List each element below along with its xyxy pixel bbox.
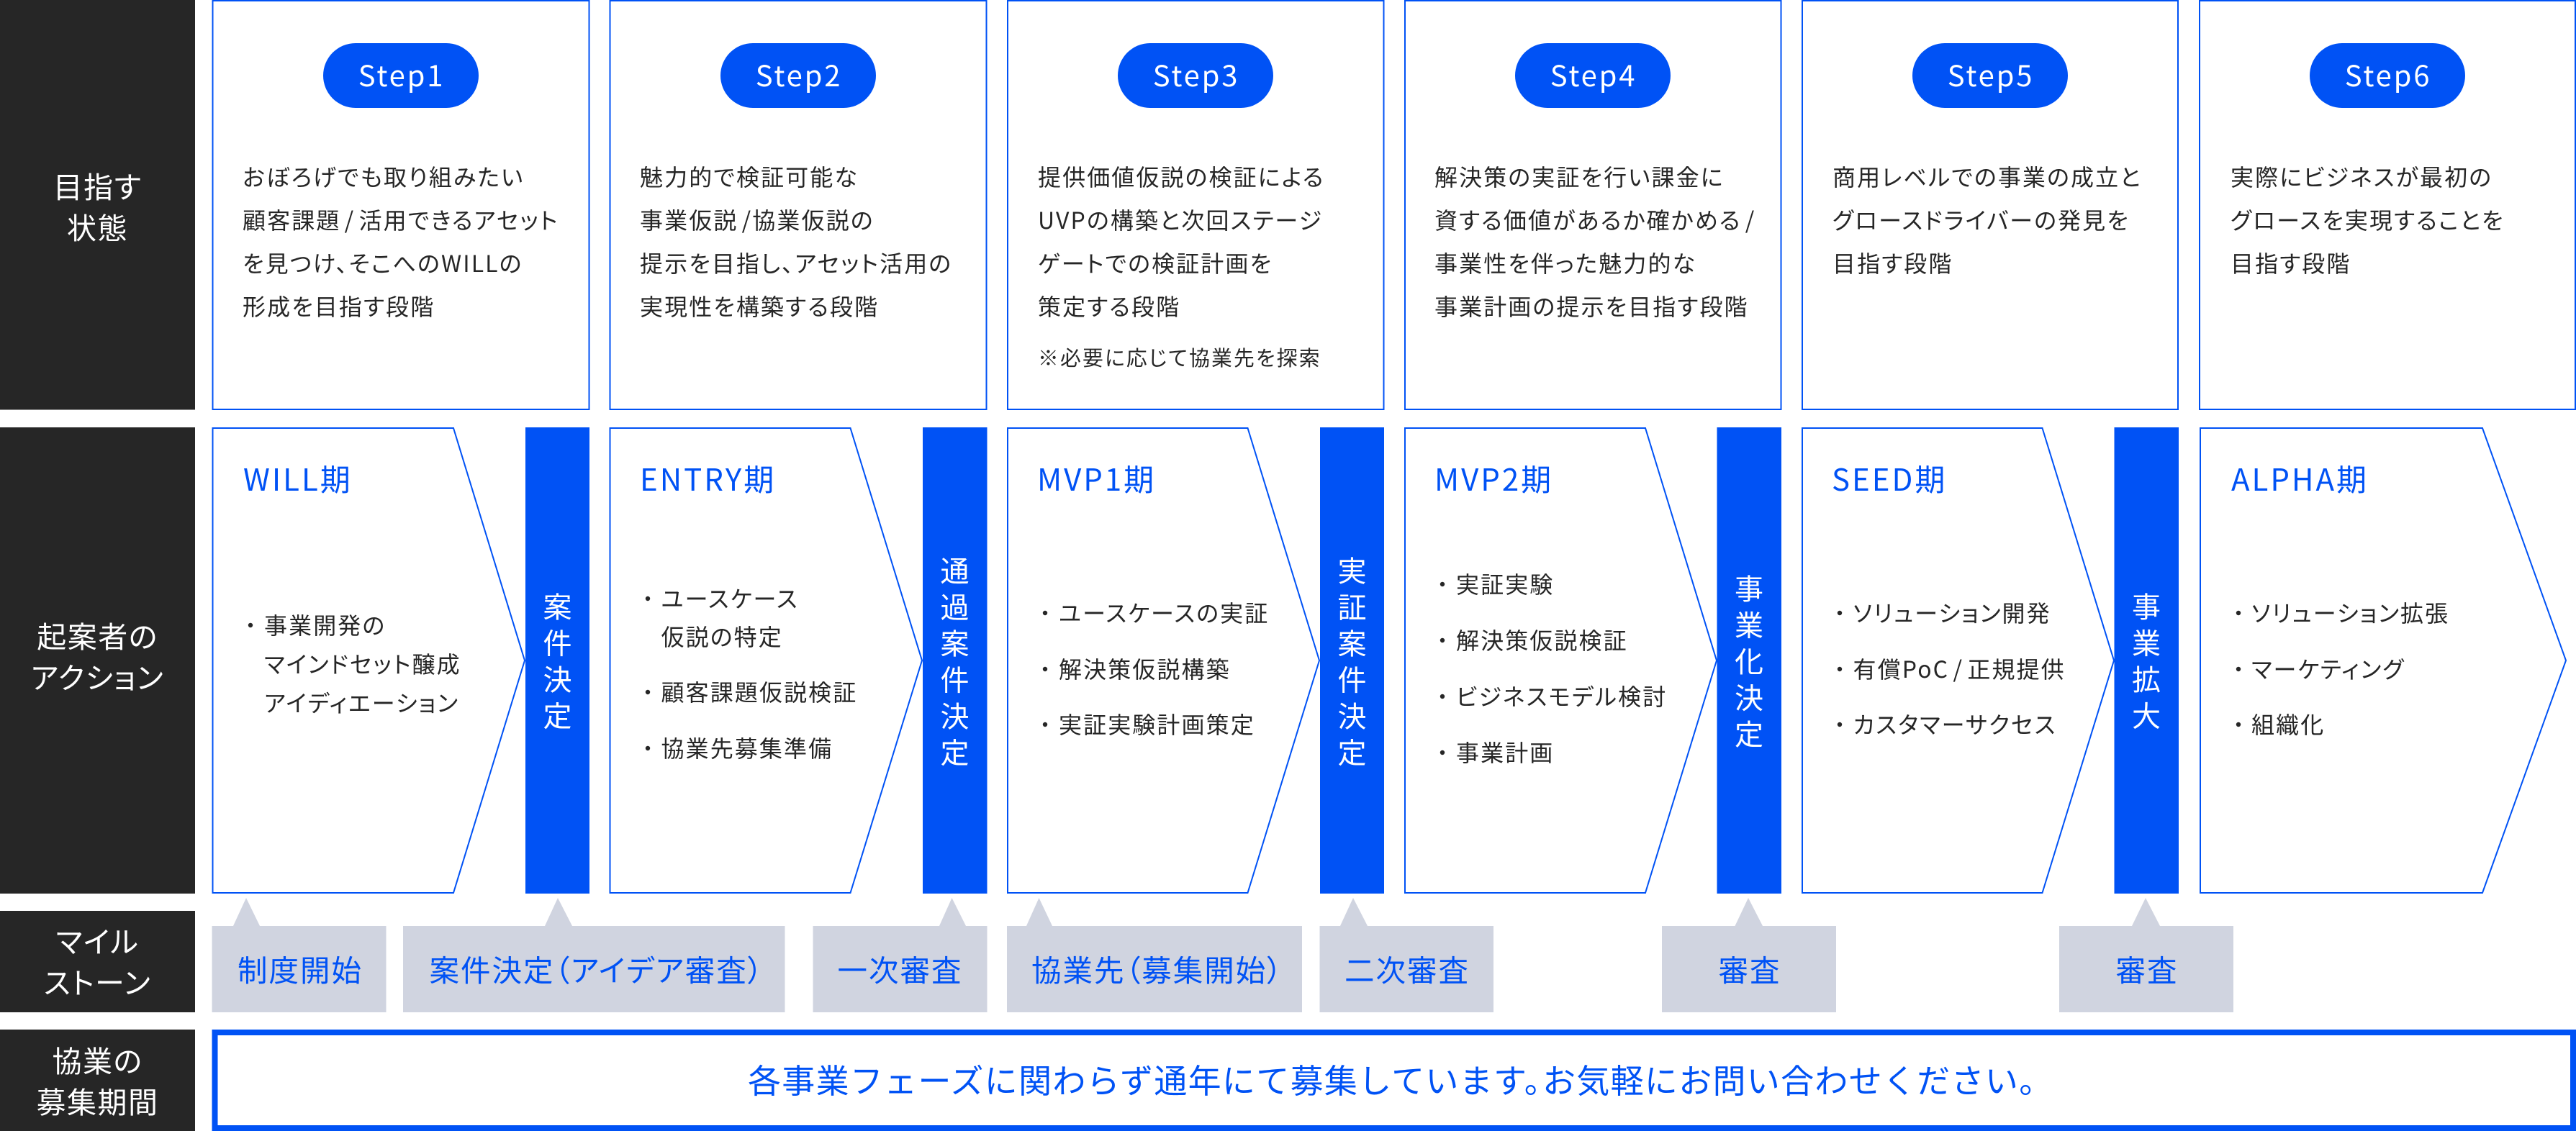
phase actions: 仮説の特定 xyxy=(661,619,783,653)
gate: 事業拡大: 大 xyxy=(2132,694,2161,735)
step 5 description: 商用レベルでの事業の成立と xyxy=(1832,160,2141,193)
step 3 note: ※必要に応じて協業先を探索 xyxy=(1038,342,1321,372)
gate: 事業化決定: 業 xyxy=(1735,603,1763,645)
row label: 起案者のアクション: アクション xyxy=(31,654,164,697)
phase actions xyxy=(1440,567,1667,768)
panel: step 6 xyxy=(2200,1,2575,409)
gate: 実証案件決定: 定 xyxy=(1337,730,1366,771)
gate: 事業化決定: 決 xyxy=(1735,675,1763,717)
phase actions: マーケティング xyxy=(2251,652,2405,685)
phase actions: 組織化 xyxy=(2251,707,2325,740)
phase actions: 実証実験 xyxy=(1456,567,1554,600)
step badge 5: Step5 xyxy=(1948,53,2034,95)
phase actions: 有償PoC / 正規提供 xyxy=(1853,652,2066,685)
phase actions xyxy=(2236,596,2449,740)
step 6 description: 実際にビジネスが最初の xyxy=(2231,160,2493,193)
step badge 3: Step3 xyxy=(1153,53,1239,95)
step 2 description: 実現性を構築する段階 xyxy=(640,289,879,322)
row label: マイルストーン: ストーン xyxy=(44,959,151,1002)
phase actions: アイディエーション xyxy=(264,686,459,719)
step badge 1 xyxy=(323,43,479,108)
panel: step 2 xyxy=(610,1,986,409)
gate: 事業化決定: 事 xyxy=(1735,566,1763,608)
phase actions: 解決策仮説構築 xyxy=(1059,652,1231,685)
gate: 実証案件決定: 実 xyxy=(1337,548,1366,590)
milestone: 案件決定（アイデア審査） xyxy=(403,898,785,1012)
gate: 通過案件決定 xyxy=(923,427,988,894)
row label: 協業の募集期間: 協業の xyxy=(52,1037,143,1081)
phase: MVP2期 xyxy=(1405,428,1717,893)
phase actions: 協業先募集準備 xyxy=(661,731,833,764)
step 5 description: グロースドライバーの発見を xyxy=(1832,203,2130,236)
panel: step 3 xyxy=(1008,1,1383,409)
step badge 5 xyxy=(1912,43,2068,108)
gate: 通過案件決定: 通 xyxy=(940,548,969,590)
phase actions: ソリューション拡張 xyxy=(2251,596,2449,629)
gate: 事業化決定: 化 xyxy=(1735,639,1763,681)
gate: 案件決定: 件 xyxy=(543,620,571,662)
step 2 description: 提示を目指し、アセット活用の xyxy=(640,246,952,279)
gate: 通過案件決定: 過 xyxy=(940,584,969,626)
phase actions: 実証実験計画策定 xyxy=(1059,707,1255,740)
phase actions: マインドセット醸成 xyxy=(264,647,461,680)
step badge 6: Step6 xyxy=(2345,53,2431,95)
row label: 目指す状態 xyxy=(0,0,195,410)
phase: ALPHA期 xyxy=(2200,428,2566,893)
callout: 協業の募集期間 xyxy=(214,1032,2573,1128)
gate: 事業拡大: 拡 xyxy=(2132,657,2161,699)
row label: 目指す状態: 目指す xyxy=(53,163,142,206)
panel: step 1 xyxy=(213,1,589,409)
step 4 description: 事業計画の提示を目指す段階 xyxy=(1434,289,1749,322)
step 1 description: を見つけ、そこへのWILLの xyxy=(243,246,523,279)
phase title: ALPHA期 xyxy=(2231,456,2369,500)
gate: 実証案件決定 xyxy=(1320,427,1384,894)
row label: マイルストーン xyxy=(0,911,195,1012)
gate: 事業化決定 xyxy=(1717,427,1781,894)
step 3 description: ゲートでの検証計画を xyxy=(1038,246,1273,279)
milestone: 審査 xyxy=(1662,898,1836,1012)
phase actions: ユースケースの実証 xyxy=(1059,596,1269,629)
phase: WILL期 xyxy=(213,428,525,893)
row label: 起案者のアクション: 起案者の xyxy=(37,613,158,656)
milestone: 案件決定（アイデア審査）: 案件決定（アイデア審査） xyxy=(429,947,764,990)
gate: 通過案件決定: 定 xyxy=(940,730,969,771)
gate: 通過案件決定: 件 xyxy=(940,658,969,699)
milestone: 協業先（募集開始）: 協業先（募集開始） xyxy=(1031,947,1283,990)
step badge 4: Step4 xyxy=(1550,53,1637,95)
step 3 description: 策定する段階 xyxy=(1038,289,1180,322)
step badge 3 xyxy=(1118,43,1273,108)
phase actions: ユースケース xyxy=(661,581,799,614)
gate: 案件決定: 案 xyxy=(543,584,571,626)
step 1 description: 形成を目指す段階 xyxy=(243,289,435,322)
step 5 description: 目指す段階 xyxy=(1832,246,1953,279)
phase title: MVP1期 xyxy=(1037,456,1156,500)
gate: 案件決定: 定 xyxy=(543,694,571,735)
phase actions: 解決策仮説検証 xyxy=(1456,623,1628,656)
step 6 description: 目指す段階 xyxy=(2231,246,2351,279)
gate: 事業拡大 xyxy=(2115,427,2179,894)
row label: 協業の募集期間: 募集期間 xyxy=(36,1078,158,1122)
milestone: 審査: 審査 xyxy=(2115,947,2179,990)
gate: 通過案件決定: 決 xyxy=(940,694,969,735)
phase title: MVP2期 xyxy=(1434,456,1553,500)
step 4 description: 資する価値があるか確かめる / xyxy=(1434,203,1755,236)
gate: 事業拡大: 事 xyxy=(2132,584,2161,626)
row label: マイルストーン: マイル xyxy=(56,918,139,961)
step 1 description: おぼろげでも取り組みたい xyxy=(243,160,524,193)
phase title: SEED期 xyxy=(1832,456,1947,500)
row label: 協業の募集期間 xyxy=(0,1030,195,1131)
gate: 通過案件決定: 案 xyxy=(940,621,969,663)
milestone: 審査 xyxy=(2059,898,2233,1012)
step badge 2: Step2 xyxy=(756,53,842,95)
milestone: 一次審査: 一次審査 xyxy=(837,947,963,990)
milestone: 制度開始 xyxy=(212,898,386,1012)
phase: MVP1期 xyxy=(1008,428,1319,893)
gate: 実証案件決定: 決 xyxy=(1337,694,1366,735)
gate: 事業化決定: 定 xyxy=(1735,712,1763,753)
phase title: WILL期 xyxy=(243,456,353,500)
phase actions: 事業計画 xyxy=(1456,735,1554,768)
gate: 実証案件決定: 案 xyxy=(1337,621,1366,663)
gate: 案件決定: 決 xyxy=(543,657,571,699)
phase actions: カスタマーサクセス xyxy=(1853,707,2056,740)
milestone: 二次審査: 二次審査 xyxy=(1345,947,1470,990)
step 2 description: 事業仮説 /協業仮説の xyxy=(640,203,875,236)
phase: ENTRY期 xyxy=(610,428,922,893)
step 2 description: 魅力的で検証可能な xyxy=(640,160,859,193)
gate: 事業拡大: 業 xyxy=(2132,620,2161,662)
step 4 description: 事業性を伴った魅力的な xyxy=(1434,246,1696,279)
phase actions xyxy=(1043,596,1269,740)
step 3 description: UVPの構築と次回ステージ xyxy=(1038,203,1323,236)
gate: 案件決定 xyxy=(525,427,589,894)
step 6 description: グロースを実現することを xyxy=(2231,203,2505,236)
phase actions xyxy=(1838,596,2066,740)
phase actions xyxy=(248,608,461,719)
phase title: ENTRY期 xyxy=(640,456,776,500)
milestone: 協業先（募集開始） xyxy=(1007,898,1302,1012)
step badge 4 xyxy=(1515,43,1671,108)
panel: step 4 xyxy=(1405,1,1781,409)
gate: 実証案件決定: 証 xyxy=(1337,584,1366,626)
gate: 実証案件決定: 件 xyxy=(1337,658,1366,699)
step 1 description: 顧客課題 / 活用できるアセット xyxy=(243,203,559,236)
phase actions: ソリューション開発 xyxy=(1853,596,2051,629)
milestone: 二次審査 xyxy=(1320,898,1493,1012)
step badge 6 xyxy=(2310,43,2465,108)
phase: SEED期 xyxy=(1802,428,2114,893)
step 4 description: 解決策の実証を行い課金に xyxy=(1434,160,1725,193)
panel: step 5 xyxy=(1802,1,2178,409)
row label: 起案者のアクション xyxy=(0,427,195,894)
milestone: 制度開始: 制度開始 xyxy=(238,947,363,990)
row label: 目指す状態: 状態 xyxy=(67,204,128,247)
phase actions: 顧客課題仮説検証 xyxy=(661,675,857,708)
step badge 1: Step1 xyxy=(358,53,445,95)
phase actions: 事業開発の xyxy=(264,608,386,641)
step badge 2 xyxy=(720,43,876,108)
step 3 description: 提供価値仮説の検証による xyxy=(1038,160,1325,193)
phase actions xyxy=(646,581,857,764)
callout: 協業の募集期間: 各事業フェーズに関わらず通年にて募集しています。お気軽にお問い合わせください。 xyxy=(748,1055,2053,1103)
milestone: 一次審査 xyxy=(813,898,988,1012)
milestone: 審査: 審査 xyxy=(1718,947,1781,990)
phase actions: ビジネスモデル検討 xyxy=(1456,679,1667,712)
